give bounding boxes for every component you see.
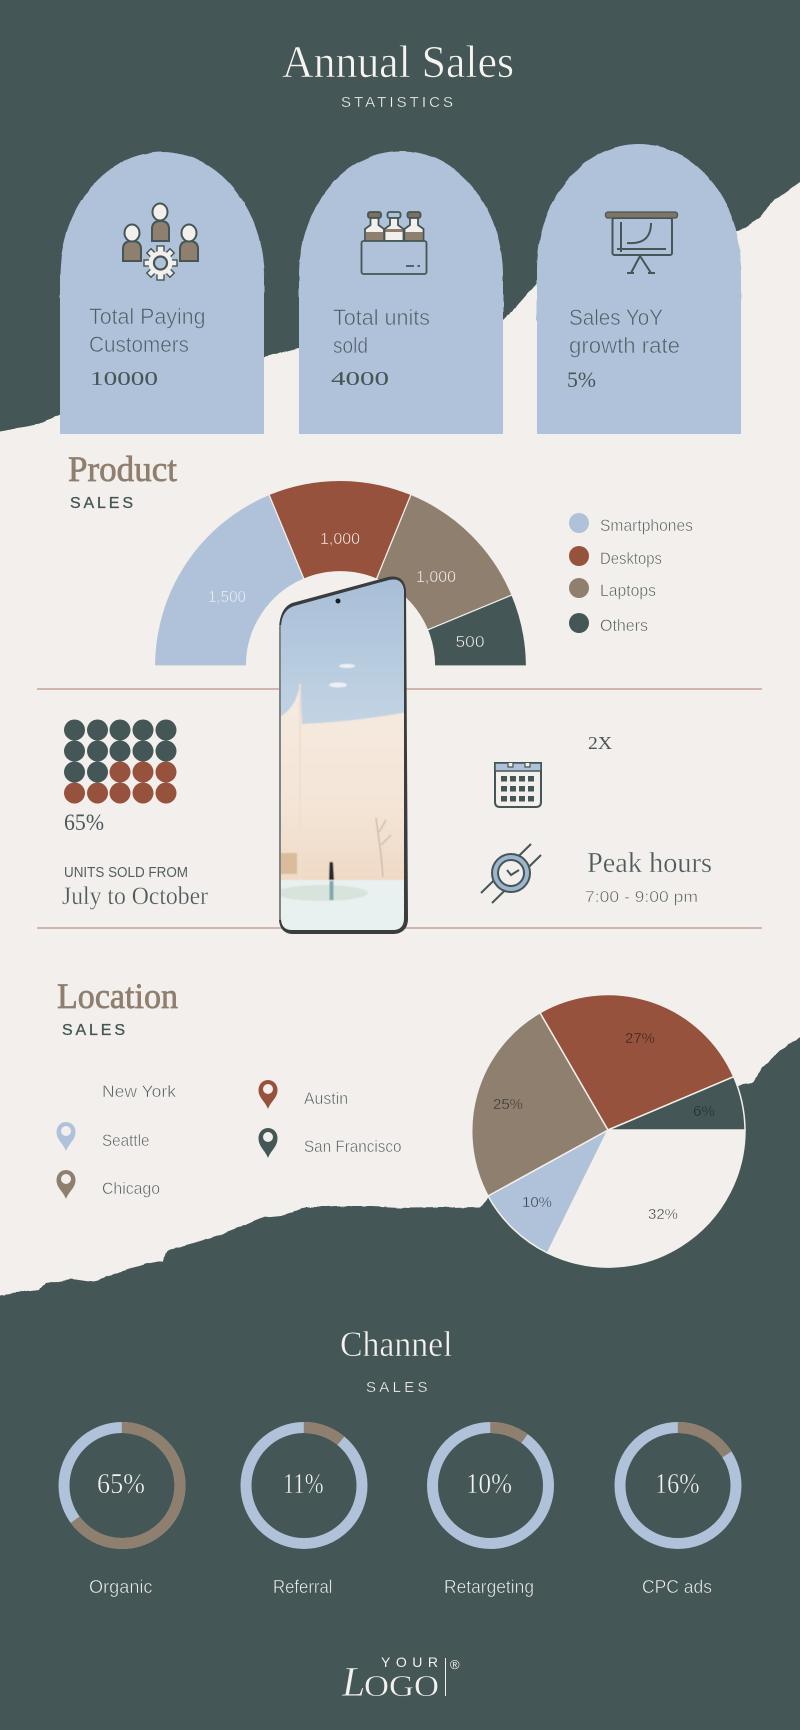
chart: retargeting donut xyxy=(432,1428,548,1597)
label: CPC ads xyxy=(642,1577,712,1597)
value san francisco: 6% xyxy=(693,1103,715,1120)
slice: others xyxy=(428,595,526,666)
slice: laptops xyxy=(376,494,512,630)
legend desktops: Desktops xyxy=(600,549,662,568)
logo xyxy=(341,1654,460,1706)
panel: total units sold xyxy=(299,151,503,434)
label line 2: Customers xyxy=(89,332,189,357)
stat: 2x: 2X xyxy=(588,733,612,753)
heading: peak hours: Peak hours xyxy=(587,847,712,879)
image: smartphone xyxy=(276,572,408,934)
subheading: SALES xyxy=(366,1379,428,1396)
slice: chicago xyxy=(472,1013,608,1196)
icon: boxed bottles xyxy=(362,212,426,274)
label line 2: sold xyxy=(333,333,368,358)
icon: presentation board xyxy=(606,212,678,273)
legend laptops: Laptops xyxy=(600,581,656,600)
phone screen xyxy=(276,572,408,932)
phone camera xyxy=(336,598,340,604)
value: 10% xyxy=(466,1469,512,1500)
panel: total paying customers xyxy=(60,152,264,434)
location new york: New York xyxy=(102,1082,177,1101)
arch card xyxy=(299,151,503,434)
stat: 65 percent: 65% xyxy=(64,810,104,835)
location san francisco: San Francisco xyxy=(304,1137,402,1156)
chart: 65 percent dot grid xyxy=(64,720,176,804)
chart: organic donut xyxy=(64,1428,180,1597)
background: dark torn bottom xyxy=(0,1030,800,1730)
value: 5% xyxy=(567,367,596,392)
location san francisco xyxy=(258,1128,402,1158)
value: 11% xyxy=(283,1469,324,1500)
subheading: SALES xyxy=(62,1022,125,1039)
value new york: 32% xyxy=(648,1206,678,1223)
legend others: Others xyxy=(600,616,648,635)
slice: austin xyxy=(540,995,734,1130)
slice: desktops xyxy=(269,480,411,579)
location seattle xyxy=(56,1122,150,1151)
title: Annual Sales xyxy=(282,36,514,87)
slice: seattle xyxy=(488,1130,608,1253)
label: Retargeting xyxy=(444,1577,534,1597)
logo word your: YOUR xyxy=(381,1654,438,1670)
legend: locations xyxy=(56,1080,402,1199)
logo letters ogo: OGO xyxy=(364,1668,439,1703)
location austin: Austin xyxy=(304,1089,348,1108)
chart: product semicircle donut xyxy=(154,480,526,666)
chart: location pie xyxy=(472,995,745,1267)
heading: Location xyxy=(57,976,178,1016)
value laptops: 1,000 xyxy=(416,569,456,586)
chart: referral donut xyxy=(246,1428,362,1597)
logo divider xyxy=(445,1658,446,1696)
background: dark torn top xyxy=(0,0,800,431)
value smartphones: 1,500 xyxy=(208,589,246,606)
label: Total units xyxy=(333,305,430,330)
chart: cpc ads donut xyxy=(620,1428,736,1597)
text: peak time: 7:00 - 9:00 pm xyxy=(585,889,698,906)
arch card xyxy=(60,152,264,434)
stat: july to october: July to October xyxy=(62,883,209,910)
title block xyxy=(282,36,514,111)
icon: wristwatch xyxy=(481,844,541,903)
value seattle: 10% xyxy=(522,1194,552,1211)
phone body xyxy=(279,577,408,934)
heading: product sales xyxy=(68,449,177,512)
value: 10000 xyxy=(90,368,158,390)
phone left bezel highlight xyxy=(279,625,281,920)
value chicago: 25% xyxy=(493,1096,523,1113)
value desktops: 1,000 xyxy=(320,531,360,548)
location chicago: Chicago xyxy=(102,1179,160,1198)
location seattle: Seattle xyxy=(102,1131,150,1150)
value others: 500 xyxy=(456,634,485,651)
logo letter l: L xyxy=(341,1660,365,1706)
legend: product xyxy=(569,513,693,635)
label: Sales YoY xyxy=(569,305,663,330)
icon: customers and gear xyxy=(123,204,198,280)
panel: sales yoy growth rate xyxy=(537,144,741,434)
heading: Product xyxy=(68,449,177,489)
logo registered mark: ® xyxy=(450,1657,460,1672)
legend smartphones: Smartphones xyxy=(600,516,693,535)
slice: new york xyxy=(548,1130,745,1267)
value: 65% xyxy=(97,1469,145,1500)
heading: channel sales xyxy=(340,1324,452,1396)
heading: Channel xyxy=(340,1324,452,1364)
pie values xyxy=(493,1030,715,1223)
heading: location sales xyxy=(57,976,178,1039)
subtitle: STATISTICS xyxy=(341,94,453,111)
label: Referral xyxy=(273,1577,332,1597)
label: Total Paying xyxy=(89,304,206,329)
location chicago xyxy=(56,1170,160,1199)
label: Organic xyxy=(89,1577,152,1597)
value austin: 27% xyxy=(625,1030,655,1047)
value: 4000 xyxy=(331,368,389,390)
slice: san francisco xyxy=(608,1077,745,1130)
chart values xyxy=(208,531,485,651)
value: 16% xyxy=(655,1469,700,1500)
arch card xyxy=(537,144,741,434)
location austin xyxy=(258,1080,348,1109)
icon: calendar xyxy=(495,763,541,807)
label line 2: growth rate xyxy=(569,333,680,358)
slice: smartphones xyxy=(154,494,304,666)
subheading: SALES xyxy=(70,495,133,512)
label: units sold from: UNITS SOLD FROM xyxy=(64,865,188,881)
